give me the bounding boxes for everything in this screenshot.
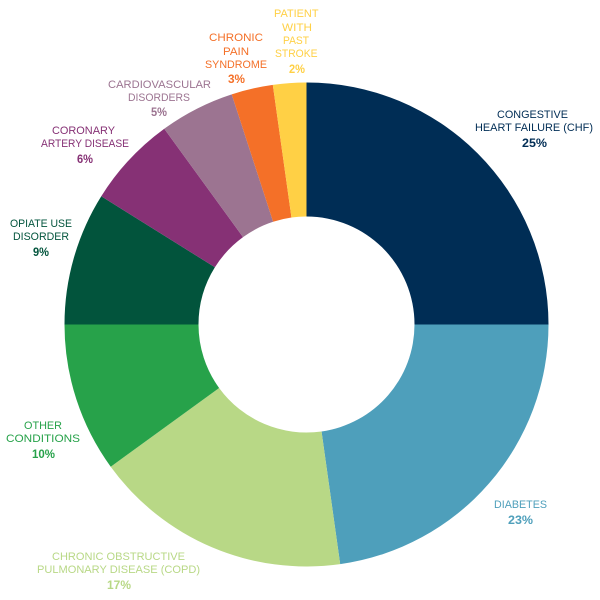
- label: chronic pain syndrome: [205, 32, 267, 86]
- label: coronary artery disease: 6%: [77, 152, 93, 166]
- label: patient with past stroke: 2%: [289, 62, 305, 76]
- label: COPD: CHRONIC OBSTRUCTIVE: [52, 551, 185, 563]
- slice: congestive heart failure 25%: [306, 82, 548, 324]
- label: congestive heart failure: [475, 109, 593, 150]
- label: patient with past stroke: STROKE: [275, 48, 318, 60]
- label: patient with past stroke: PAST: [283, 35, 309, 47]
- label: opiate use disorder: 9%: [33, 245, 49, 259]
- label: coronary artery disease: [41, 125, 129, 166]
- label: coronary artery disease: CORONARY: [52, 125, 116, 137]
- label: other conditions: [6, 420, 80, 461]
- label: congestive heart failure: CONGESTIVE: [497, 109, 568, 121]
- label: chronic pain syndrome: 3%: [228, 72, 245, 86]
- label: COPD: PULMONARY DISEASE (COPD): [37, 564, 200, 576]
- label: cardiovascular disorders: CARDIOVASCULAR: [108, 79, 211, 91]
- slice: COPD 17%: [111, 388, 340, 567]
- label: other conditions: CONDITIONS: [6, 433, 80, 445]
- label: cardiovascular disorders: [108, 79, 211, 119]
- label: other conditions: 10%: [32, 447, 55, 461]
- label: patient with past stroke: WITH: [282, 22, 312, 34]
- label: cardiovascular disorders: 5%: [151, 105, 167, 119]
- label: diabetes: 23%: [508, 513, 533, 527]
- label: diabetes: [494, 499, 547, 527]
- label: patient with past stroke: PATIENT: [274, 8, 319, 20]
- slice: cardiovascular disorders 5%: [164, 94, 273, 237]
- label: other conditions: OTHER: [24, 420, 62, 432]
- donut chart: [64, 82, 548, 567]
- label: patient with past stroke: [274, 8, 319, 76]
- label: congestive heart failure: 25%: [522, 136, 547, 150]
- label: diabetes: DIABETES: [494, 499, 547, 511]
- label: opiate use disorder: DISORDER: [13, 231, 69, 243]
- label: chronic pain syndrome: CHRONIC: [209, 32, 263, 44]
- slice: chronic pain syndrome 3%: [232, 85, 291, 222]
- label: opiate use disorder: OPIATE USE: [10, 218, 72, 230]
- label: COPD: [37, 551, 200, 592]
- slice: opiate use disorder 9%: [64, 196, 215, 324]
- label: chronic pain syndrome: PAIN: [223, 46, 249, 58]
- label: chronic pain syndrome: SYNDROME: [205, 59, 267, 71]
- label: COPD: 17%: [107, 578, 131, 592]
- label: congestive heart failure: HEART FAILURE (CHF): [475, 122, 593, 134]
- slice: patient with past stroke 2%: [273, 82, 306, 218]
- label: cardiovascular disorders: DISORDERS: [128, 92, 190, 104]
- label: coronary artery disease: ARTERY DISEASE: [41, 138, 129, 150]
- slice: other conditions 10%: [64, 324, 219, 467]
- label: opiate use disorder: [10, 218, 72, 259]
- slice: coronary artery disease 6%: [101, 129, 243, 267]
- slice: diabetes 23%: [322, 324, 548, 564]
